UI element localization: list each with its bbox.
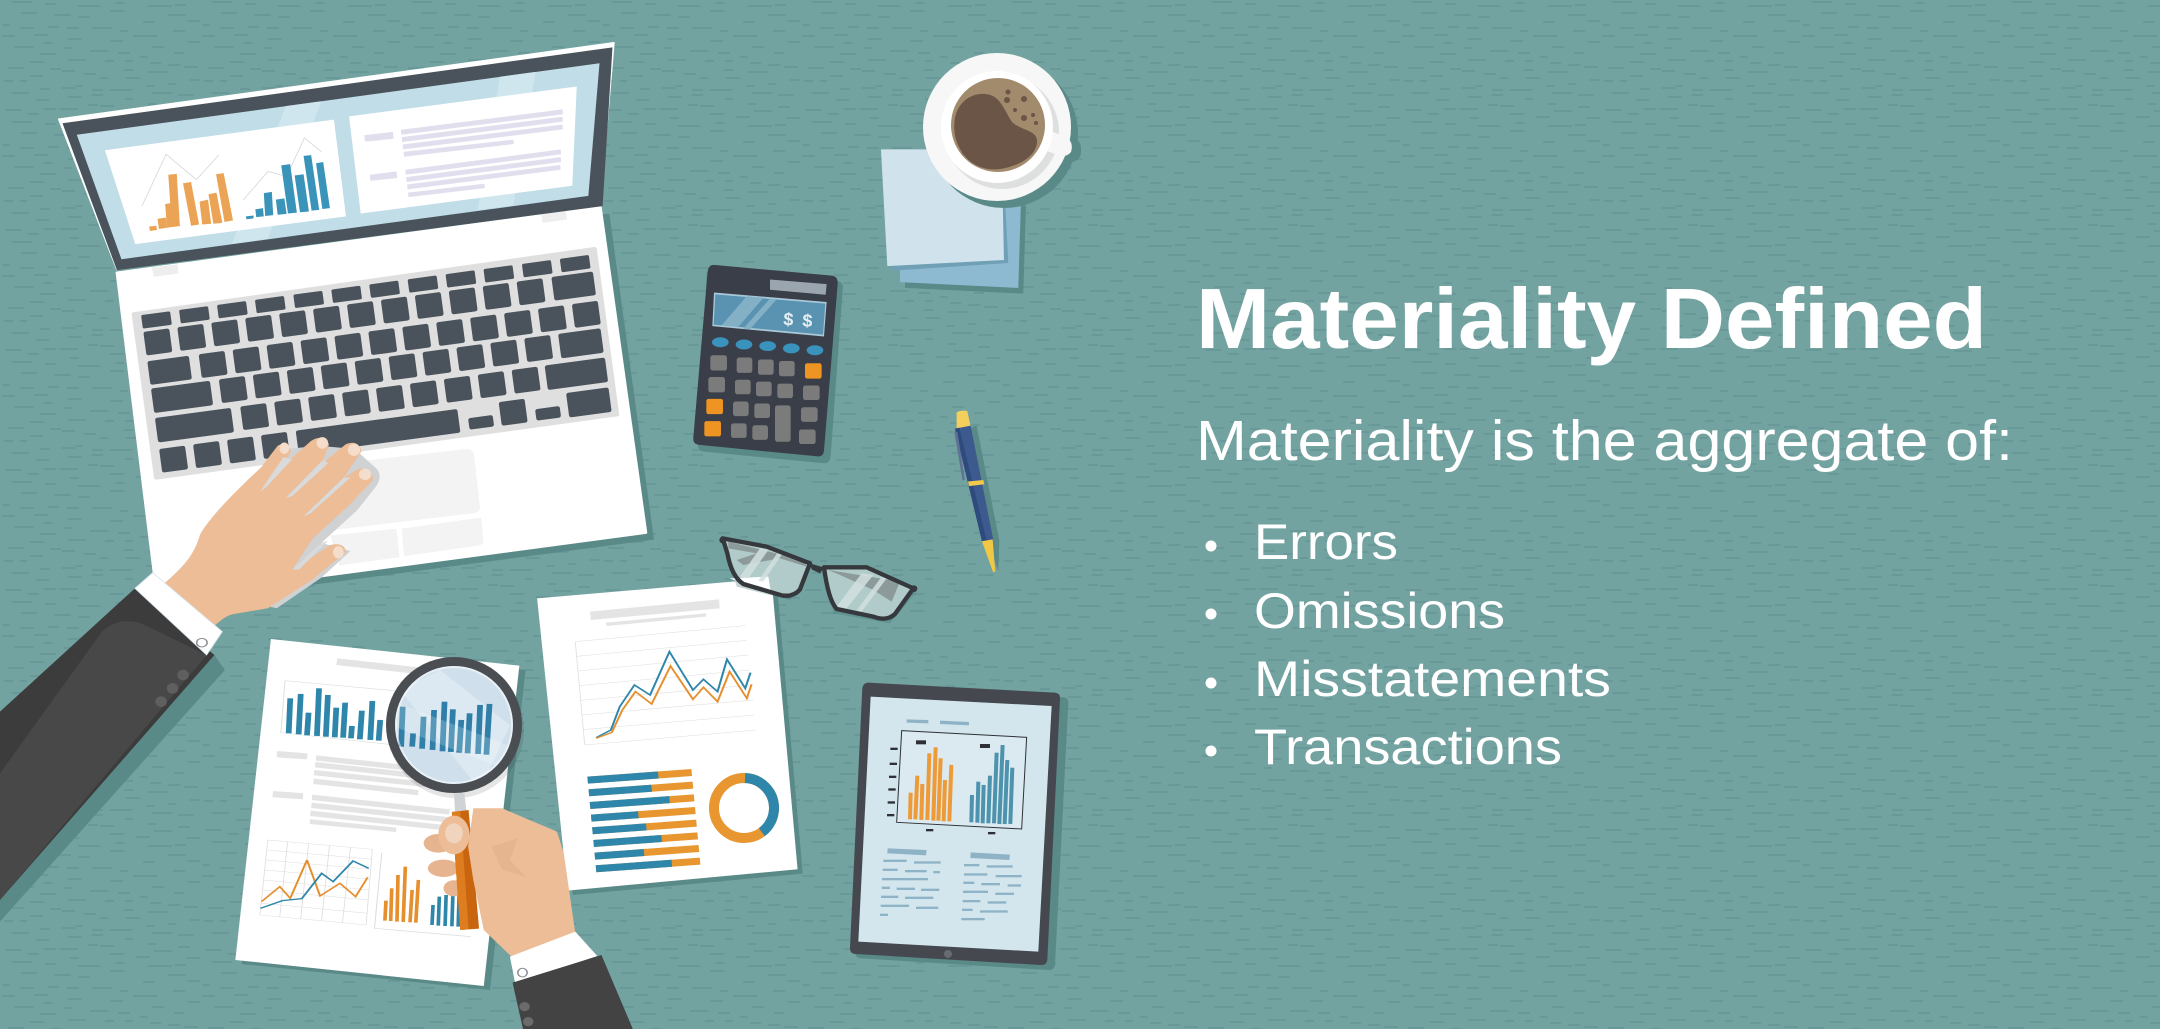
bar chart [281,681,513,757]
screen panel: charts [105,120,346,244]
laptop lid and screen [59,43,614,270]
bullet list [1206,514,1611,775]
line chart [575,626,756,745]
line chart with grid [260,840,372,925]
right hand fingers holding handle [424,834,464,896]
donut chart [713,777,775,839]
right cuff [510,932,597,983]
document with bar chart under magnifier [235,639,526,990]
calculator display [712,292,827,336]
list item: Transactions: Transactions [1254,719,1562,775]
right hand and cuff [438,808,633,1029]
function buttons [712,337,823,355]
document with line chart, stacked bars and donut [537,578,803,895]
keyboard [134,249,617,478]
magnified bars [397,670,510,779]
magnifying glass [388,662,524,930]
cup handle [1044,130,1072,156]
left sleeve and cuff [0,573,225,922]
front note [881,149,1004,266]
thumb [438,816,470,854]
sticky notes [881,149,1026,294]
laptop [59,43,654,631]
title: Materiality Defined [1196,272,1987,367]
document text lines [272,751,450,832]
calculator [693,265,843,463]
tablet chart [887,731,1027,834]
tablet text lines [880,848,1022,920]
palm [468,808,575,957]
tablet [850,683,1068,970]
sleeve buttons [155,670,189,707]
coffee cup and saucer [923,53,1081,208]
pen [954,411,999,572]
right sleeve [513,955,633,1029]
screen panel: text [349,87,577,213]
calculator keys [708,355,820,444]
trackpad [312,449,483,565]
subtitle: Materiality is the aggregate of: [1196,409,2013,473]
magnifier handle [452,793,479,930]
list item: Misstatements: Misstatements [1254,651,1611,707]
stacked bar chart [587,769,700,872]
eyeglasses [719,537,917,623]
laptop base [117,207,654,604]
small bar chart [374,853,471,937]
hand on keyboard [163,437,380,631]
coffee [951,78,1045,172]
list item: Errors: Errors [1254,514,1398,570]
list item: Omissions: Omissions [1254,583,1505,639]
calculator display text: $ $ [783,309,813,331]
back note [900,196,1021,288]
tablet screen [858,697,1052,952]
